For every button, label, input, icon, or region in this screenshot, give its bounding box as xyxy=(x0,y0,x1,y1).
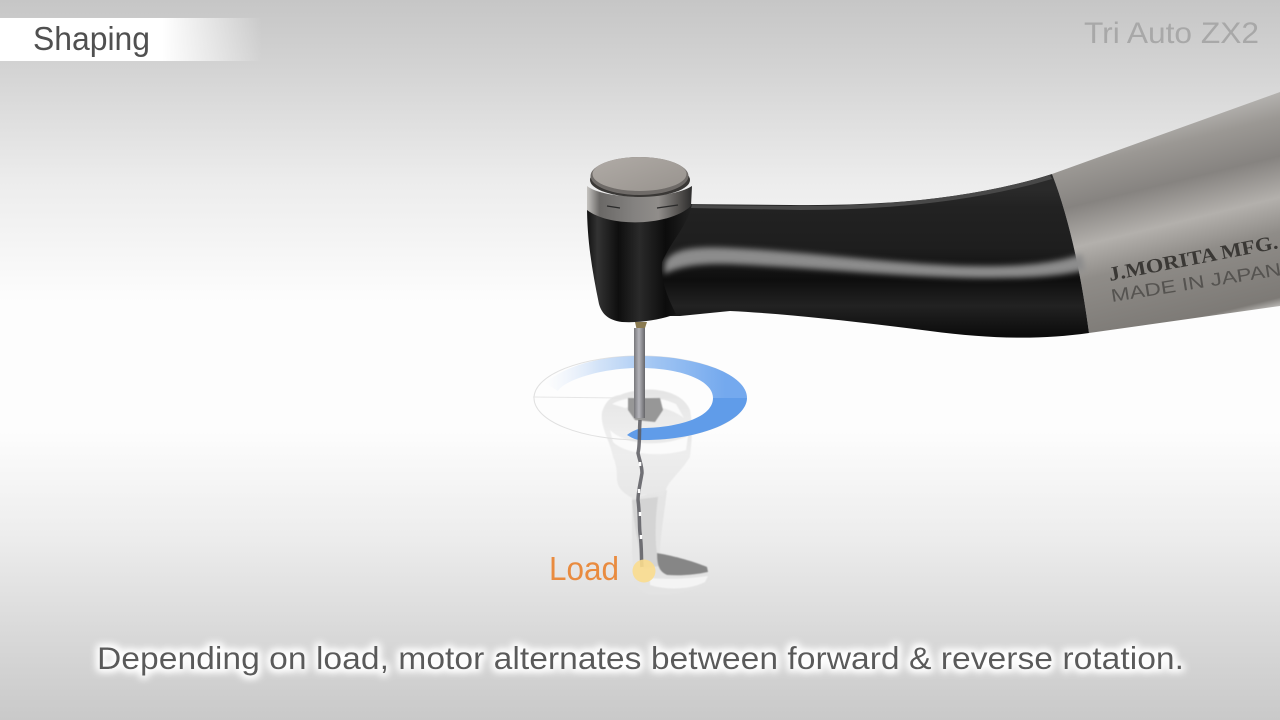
spiral file xyxy=(638,420,642,567)
root apex shadow xyxy=(657,553,708,575)
handpiece cap xyxy=(590,157,690,197)
handpiece silver grip xyxy=(1052,92,1280,333)
root canal xyxy=(632,497,660,568)
section heading: Shaping: Shaping xyxy=(33,20,150,57)
caption: Depending on load, motor alternates between forward & reverse rotation. xyxy=(97,640,1184,676)
engraved text: MADE IN JAPAN: MADE IN JAPAN xyxy=(1109,259,1280,306)
tooth crown xyxy=(602,390,692,498)
crown enamel highlights xyxy=(612,397,684,418)
tooth root xyxy=(632,490,710,595)
file shaft xyxy=(634,328,645,418)
label: Load: Load xyxy=(549,550,619,587)
product name: Tri Auto ZX2: Tri Auto ZX2 xyxy=(1084,17,1259,50)
load marker xyxy=(632,560,656,582)
dental handpiece xyxy=(587,92,1280,338)
rotation arrow ring xyxy=(533,356,747,440)
handpiece metal band xyxy=(587,186,692,222)
ring outline xyxy=(534,356,746,440)
tooth cross-section xyxy=(602,390,710,595)
bur latch tip xyxy=(635,322,647,331)
handpiece black neck xyxy=(655,174,1089,338)
section heading: Shaping xyxy=(0,18,262,61)
engraved text: J.MORITA MFG.: J.MORITA MFG. xyxy=(1107,231,1280,286)
handpiece head body xyxy=(587,204,692,322)
ring arrow, solid head xyxy=(627,398,747,440)
access cavity xyxy=(628,398,663,422)
ring arrow, fading sweep xyxy=(545,356,747,398)
